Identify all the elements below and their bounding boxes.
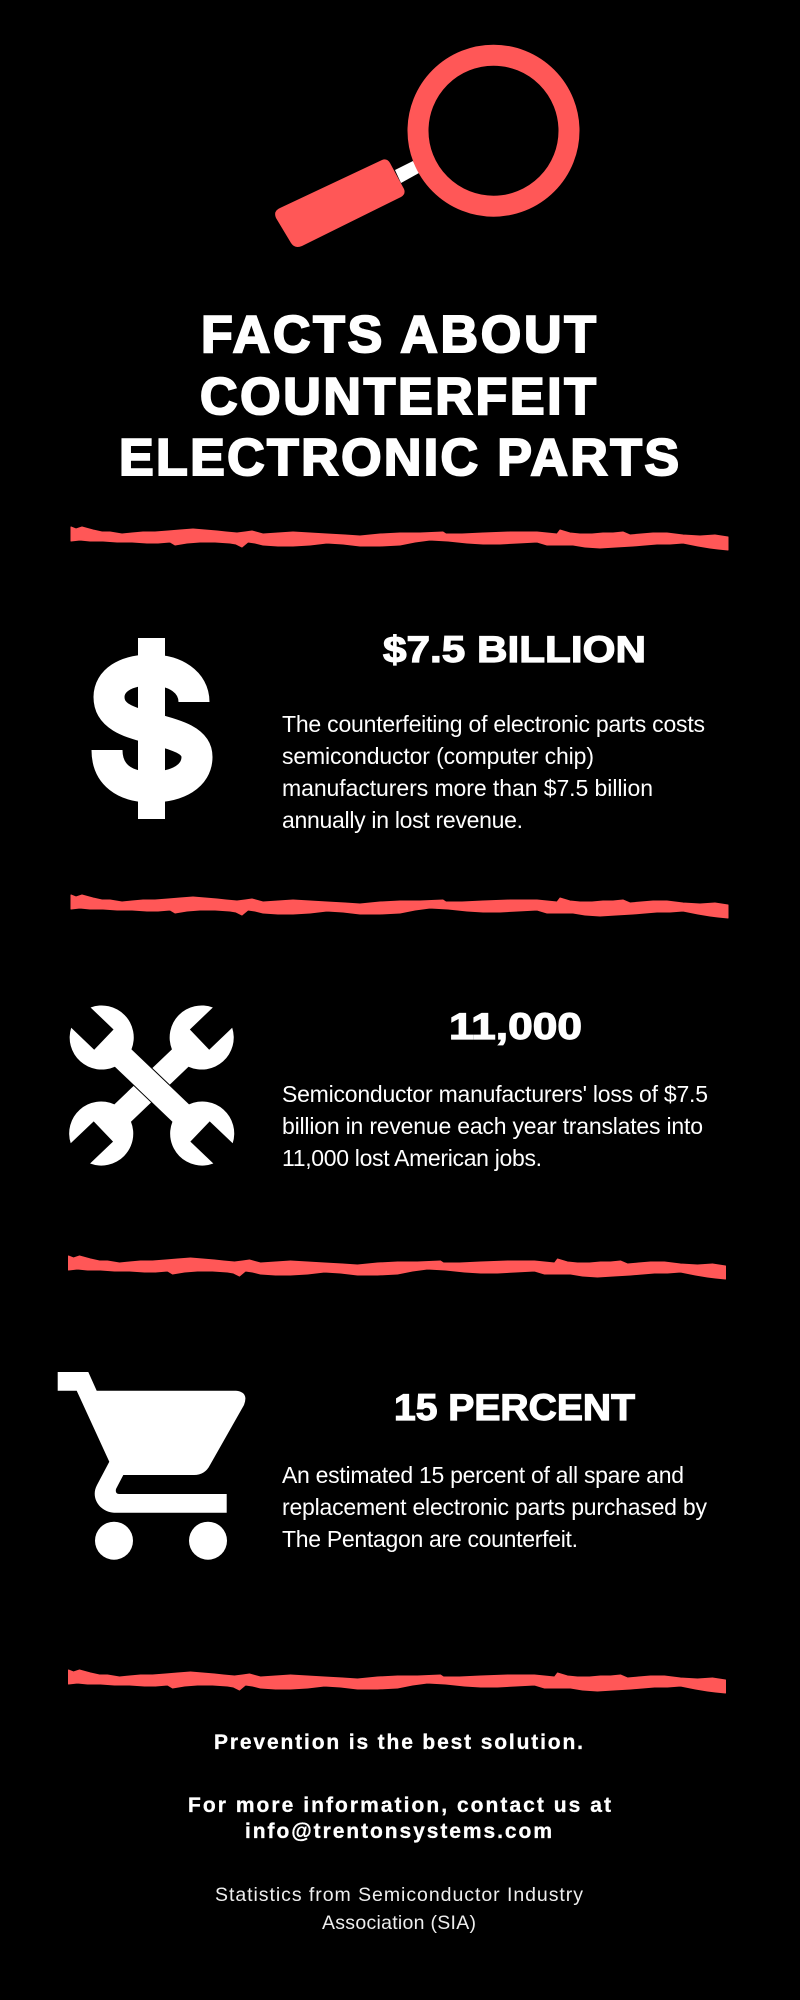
text: $7.5 billion description (282, 711, 705, 833)
icon: dollar sign (107, 638, 197, 819)
text: $7.5 billion description: manufacturers more than $7.5 billion (282, 775, 653, 801)
text: 11,000 description (282, 1081, 708, 1171)
icon: shopping cart (58, 1372, 245, 1560)
icon: crossed wrenches (58, 994, 245, 1177)
text: 11,000 description: 11,000 lost American jobs. (282, 1145, 542, 1171)
footer: source note (215, 1884, 583, 1934)
text: 15 percent description: replacement electronic parts purchased by (282, 1494, 708, 1520)
icon: magnifying glass (275, 55, 569, 247)
text: $7.5 billion description: semiconductor (computer chip) (282, 743, 594, 769)
title: COUNTERFEIT (200, 368, 596, 426)
text: $7.5 billion description: annually in lost revenue. (282, 807, 523, 833)
text: 15 percent description (282, 1462, 708, 1552)
heading: $7.5 billion: $7.5 BILLION (383, 628, 646, 670)
title: ELECTRONIC PARTS (119, 429, 679, 487)
heading: 11,000: 11,000 (449, 1005, 582, 1047)
text: 15 percent description: The Pentagon are counterfeit. (282, 1526, 578, 1552)
title (119, 306, 679, 487)
footer: contact information: info@trentonsystems.com (245, 1820, 552, 1843)
footer: source note: Statistics from Semiconductor Industry (215, 1884, 583, 1906)
text: 15 percent description: An estimated 15 percent of all spare and (282, 1462, 684, 1488)
text: 11,000 description: Semiconductor manufacturers' loss of $7.5 (282, 1081, 708, 1107)
text: 11,000 description: billion in revenue each year translates into (282, 1113, 703, 1139)
heading: 15 percent: 15 PERCENT (394, 1386, 635, 1428)
text: $7.5 billion description: The counterfeiting of electronic parts costs (282, 711, 705, 737)
footer: contact information: For more information, contact us at (188, 1794, 611, 1817)
panel: 11,000 (58, 994, 708, 1177)
footer: contact information (188, 1794, 611, 1843)
footer: prevention message: Prevention is the best solution. (214, 1731, 583, 1754)
title: FACTS ABOUT (201, 306, 596, 364)
panel: 15 percent (58, 1372, 707, 1560)
panel: $7.5 billion (107, 628, 705, 833)
footer: source note: Association (SIA) (322, 1912, 476, 1934)
